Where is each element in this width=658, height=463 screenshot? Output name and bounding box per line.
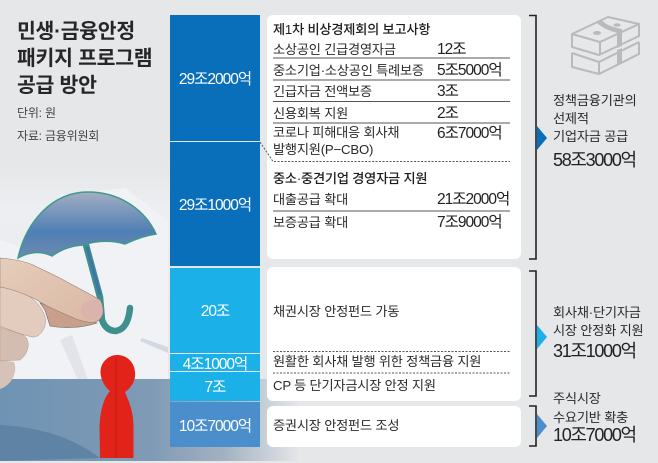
value: 6조7000억: 6조7000억 — [437, 125, 502, 142]
panel: first emergency meeting and SME funding — [267, 15, 521, 259]
bar segment: 4조1000억 — [170, 354, 260, 371]
value: 3조: 3조 — [437, 83, 458, 100]
value: 2조: 2조 — [437, 105, 458, 122]
callout: corporate bond and short-term market support — [553, 305, 643, 338]
bar segment: 7조: 7조 — [205, 379, 225, 396]
value: 5조5000억: 5조5000억 — [437, 62, 502, 79]
bar segment: 20조: 20조 — [201, 303, 229, 320]
value: 21조2000억: 21조2000억 — [437, 191, 509, 208]
icon: red figure — [100, 355, 136, 458]
total: 58조3000억: 58조3000억 — [553, 150, 636, 170]
title: 민생·금융안정 — [17, 20, 135, 43]
title — [17, 20, 152, 97]
unit note: 단위: 원 — [17, 106, 56, 120]
bar segment: 29조1000억 — [170, 142, 260, 266]
row: special guarantee: 중소기업·소상공인 특례보증 — [273, 63, 424, 78]
bar segment: 29조2000억 — [170, 15, 260, 141]
callout: policy finance 58조3000억: 정책금융기관의 — [553, 93, 637, 108]
title: 패키지 프로그램 — [17, 47, 152, 70]
row: guarantee supply: 보증공급 확대 — [273, 215, 348, 230]
bar segment: 10조7000억: 10조7000억 — [179, 418, 251, 434]
row: policy finance for corporate bonds: 원활한 회사채 발행 위한 정책금융 지원 — [273, 354, 481, 369]
total: 10조7000억: 10조7000억 — [553, 425, 636, 445]
row: loan supply: 대출공급 확대 — [273, 192, 348, 207]
value: 7조9000억: 7조9000억 — [437, 214, 502, 231]
bar segment: 7조 — [170, 372, 260, 400]
panel: securities market fund — [267, 406, 521, 447]
heading: SME management funds: 중소·중견기업 경영자금 지원 — [273, 171, 427, 186]
bar segment: 20조 — [170, 268, 260, 352]
row: securities market fund: 증권시장 안정펀드 조성 — [273, 418, 399, 433]
bar segment: 10조7000억 — [170, 402, 260, 447]
total: 31조1000억: 31조1000억 — [553, 341, 636, 361]
callout: stock market demand base: 주식시장 — [553, 391, 601, 406]
value: 12조: 12조 — [437, 41, 466, 58]
row: bond market fund: 채권시장 안정펀드 가동 — [273, 304, 399, 319]
title: 공급 방안 — [17, 74, 97, 97]
icon: umbrella held by hand — [0, 191, 157, 389]
brackets and arrows — [529, 14, 547, 447]
row: COVID P-CBO: 발행지원(P−CBO) — [273, 142, 373, 157]
heading: first emergency economic meeting: 제1차 비상경제회의 보고사항 — [273, 22, 430, 37]
row: small business emergency funds: 소상공인 긴급경영자금 — [273, 42, 396, 57]
source note: 자료: 금융위원회 — [17, 129, 99, 143]
callout: policy finance 58조3000억: 선제적 — [553, 111, 589, 126]
icon: stacks of money — [571, 16, 640, 75]
panel: bond and CP market support — [267, 267, 521, 401]
row: emergency funds full guarantee: 긴급자금 전액보증 — [273, 84, 372, 99]
callout: corporate bond and short-term market support: 회사채·단기자금 — [553, 305, 641, 320]
bar segment: 4조1000억: 4조1000억 — [183, 356, 247, 372]
bar segment: 29조2000억: 29조2000억 — [179, 71, 251, 88]
row: credit recovery: 신용회복 지원 — [273, 106, 348, 121]
callout: stock market demand base — [553, 391, 628, 425]
callout: stock market demand base: 수요기반 확충 — [553, 410, 628, 425]
row: COVID P-CBO: 코로나 피해대응 회사채 — [273, 125, 399, 140]
row: CP short-term market: CP 등 단기자금시장 안정 지원 — [273, 378, 436, 393]
row: COVID P-CBO — [273, 125, 399, 157]
bar segment: 29조1000억: 29조1000억 — [179, 197, 251, 214]
callout: policy finance 58조3000억: 기업자금 공급 — [553, 129, 628, 144]
callout: corporate bond and short-term market support: 시장 안정화 지원 — [553, 322, 643, 338]
callout: policy finance 58조3000억 — [553, 93, 637, 144]
